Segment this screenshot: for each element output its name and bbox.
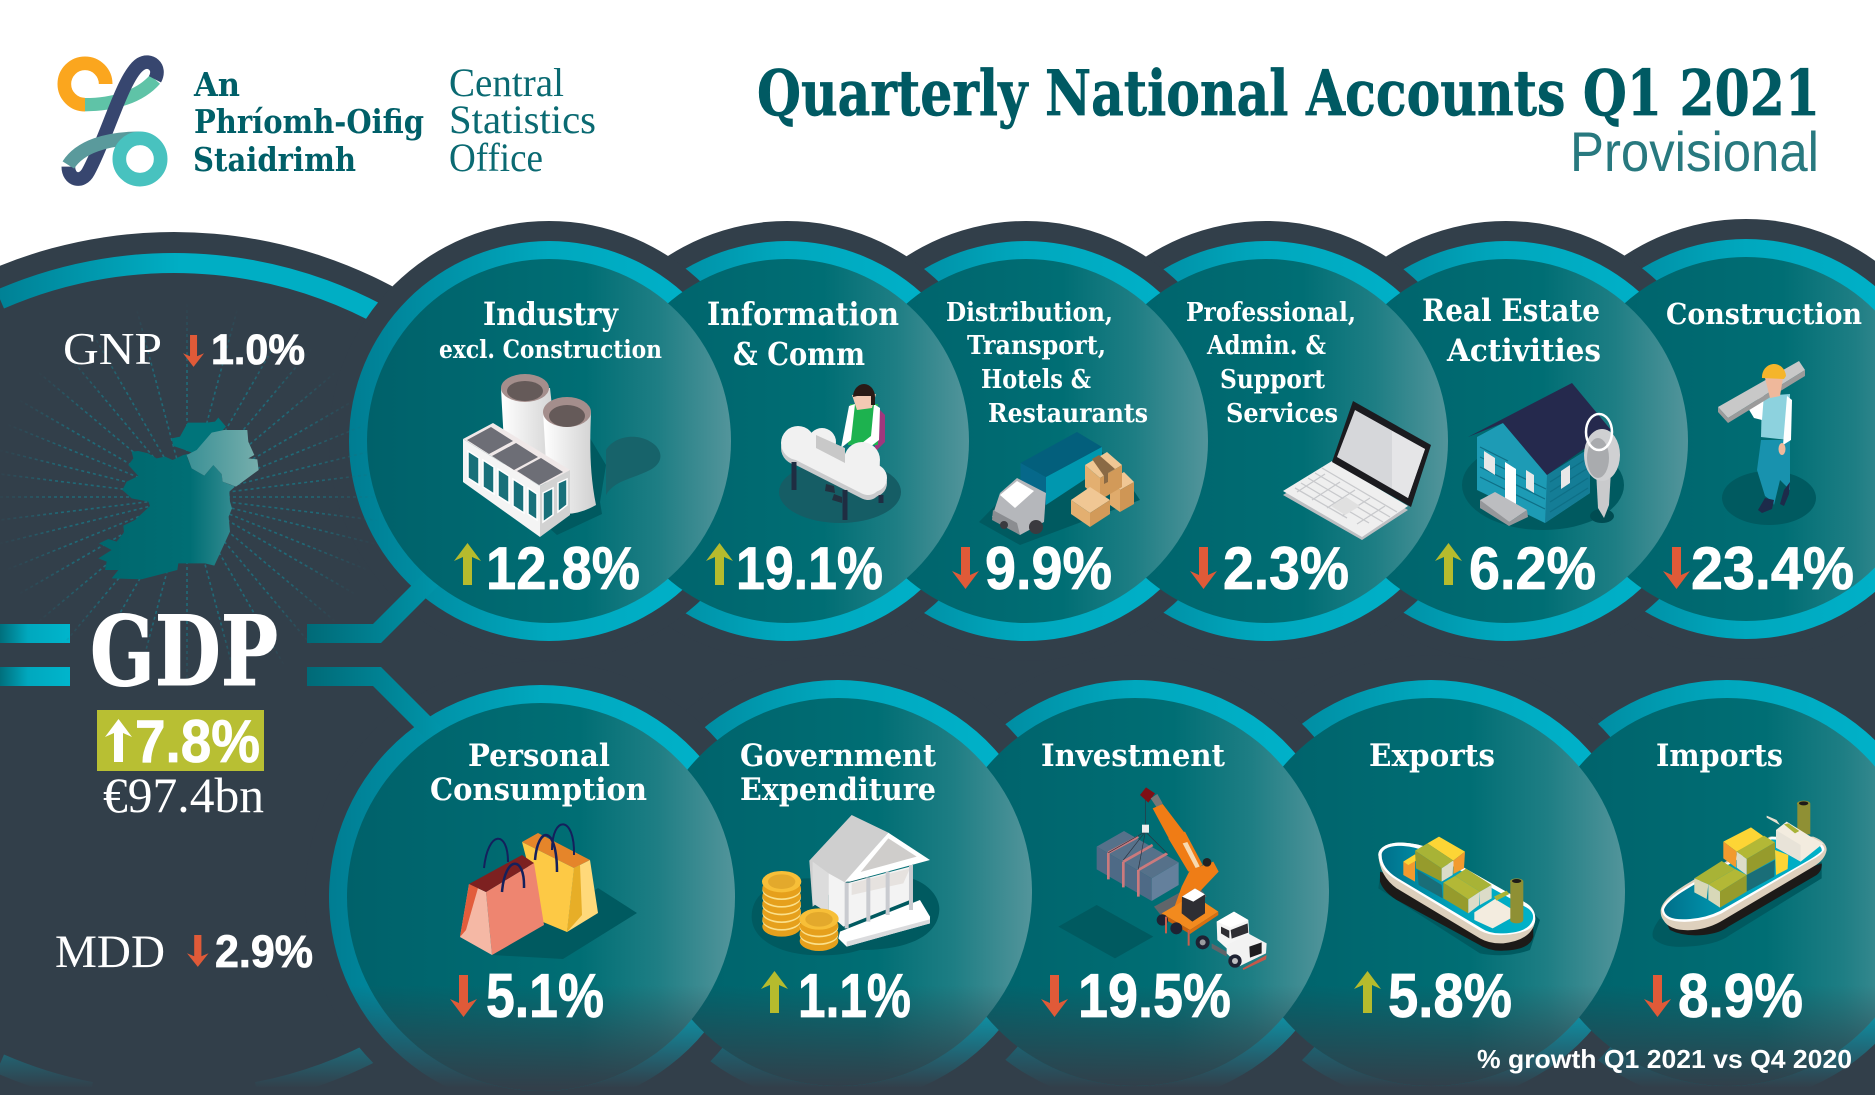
panel: Industry excl. Construction	[367, 259, 731, 623]
logo text: English name	[449, 60, 596, 180]
logo: CSO	[64, 60, 596, 180]
panel: Real Estate Activities: 6.2%	[1469, 535, 1596, 602]
logo text: English name: Central	[449, 60, 564, 105]
icon: crane lifting a module	[1058, 787, 1267, 970]
icon: shopping bags	[460, 824, 637, 959]
logo text: English name: Statistics	[449, 97, 596, 142]
logo text: Irish name	[193, 65, 424, 179]
icon: person at desk	[779, 384, 901, 523]
arrow: down	[952, 547, 979, 589]
panel: Imports: Imports	[1656, 738, 1783, 774]
panel: Distribution, Transport, Hotels & Restaurants: Distribution,	[946, 297, 1113, 328]
background: dark band	[0, 430, 1875, 1095]
panel: Investment: Investment	[1041, 738, 1226, 774]
panel: Personal Consumption: Consumption	[430, 772, 647, 808]
left headline panel backdrop	[0, 232, 420, 1092]
arrow: down	[1663, 547, 1690, 589]
panel: Information & Comm	[605, 259, 969, 623]
icon: container ship	[1652, 801, 1827, 947]
logo text: Irish name: An	[193, 65, 240, 104]
arrow: up	[1435, 543, 1462, 585]
map of Ireland	[98, 418, 259, 579]
panel: Government Expenditure: Expenditure	[740, 772, 936, 808]
MDD stat: 2.9%	[215, 926, 313, 977]
panel: Construction: Construction	[1666, 297, 1862, 331]
panel: Government Expenditure	[644, 698, 1032, 1086]
panel: Real Estate Activities	[1324, 259, 1688, 623]
MDD stat	[55, 926, 313, 978]
GDP growth badge: 7.8%	[135, 708, 260, 775]
panel: Personal Consumption: 5.1%	[486, 962, 604, 1031]
bottom fade	[0, 985, 1875, 1095]
arrow: MDD down	[187, 935, 209, 967]
panel: Industry excl. Construction: excl. Construction	[439, 335, 662, 364]
panel: Real Estate Activities: Activities	[1446, 333, 1601, 369]
panel: Industry excl. Construction: 12.8%	[486, 535, 640, 602]
footnote: % growth Q1 2021 vs Q4 2020	[1477, 1044, 1852, 1074]
panel: Industry excl. Construction: Industry	[483, 296, 620, 333]
GDP connector bars	[0, 549, 470, 768]
arrow: up	[706, 543, 733, 585]
panel: Distribution, Transport, Hotels & Restaurants	[844, 259, 1208, 623]
icon: truck and boxes	[979, 432, 1140, 545]
arrow: up	[761, 971, 788, 1013]
icon: factory with cooling towers	[463, 374, 660, 537]
rays behind map	[0, 302, 382, 692]
icon: laptop	[1283, 401, 1431, 540]
panel: Government Expenditure: 1.1%	[798, 962, 911, 1031]
GNP stat	[63, 323, 305, 374]
panel: Professional, Admin & Support Services	[1084, 259, 1448, 623]
panel rings: bottom row	[305, 655, 1875, 1095]
arrow: down	[1644, 975, 1671, 1017]
panel: Construction	[1564, 257, 1875, 621]
arrow: down	[450, 975, 477, 1017]
panel: Information & Comm: Information	[707, 295, 899, 333]
logo text: English name: Office	[449, 135, 543, 180]
logo mark	[64, 62, 161, 180]
logo text: Irish name: Phríomh-Oifig	[194, 102, 424, 141]
GDP value: €97.4bn	[103, 767, 264, 823]
panel: Exports	[1237, 698, 1625, 1086]
panel: Professional, Admin & Support Services: Services	[1226, 398, 1338, 429]
panel: Professional, Admin & Support Services: Admin. &	[1206, 330, 1326, 361]
panel: Personal Consumption: Personal	[468, 738, 610, 774]
panel: Personal Consumption	[347, 703, 735, 1091]
icon: bank and coins	[752, 815, 939, 955]
arrow: up	[454, 543, 481, 585]
subtitle: Provisional	[1570, 120, 1819, 183]
GDP heading: GDP	[90, 595, 278, 708]
arrow: up	[1354, 971, 1381, 1013]
panel: Information & Comm: 19.1%	[736, 535, 883, 602]
panel: Professional, Admin & Support Services: 2.3%	[1223, 535, 1349, 602]
icon: container ship	[1378, 837, 1540, 955]
arrow: down	[1190, 547, 1217, 589]
arrow: GNP down	[183, 335, 204, 367]
panel: Imports	[1533, 698, 1875, 1086]
GNP stat: GNP	[63, 323, 162, 374]
panel: Professional, Admin & Support Services: Support	[1220, 364, 1326, 395]
logo text: Irish name: Staidrimh	[193, 140, 356, 179]
panel: Information & Comm: & Comm	[733, 335, 865, 373]
icon: house and key	[1462, 383, 1624, 530]
panel: Exports: Exports	[1369, 738, 1495, 774]
panel: Distribution, Transport, Hotels & Restaurants: 9.9%	[985, 535, 1112, 602]
panel: Investment	[941, 698, 1329, 1086]
panel: Construction: 23.4%	[1691, 535, 1854, 602]
panel: Real Estate Activities: Real Estate	[1422, 293, 1600, 329]
GNP stat: 1.0%	[211, 326, 305, 374]
panel: Investment: 19.5%	[1078, 962, 1231, 1031]
panel: Distribution, Transport, Hotels & Restaurants: Restaurants	[988, 398, 1148, 429]
arrow: down	[1041, 975, 1068, 1017]
panel: Exports: 5.8%	[1388, 962, 1512, 1031]
panel: Government Expenditure: Government	[740, 738, 937, 774]
panel: Distribution, Transport, Hotels & Restaurants: Transport,	[967, 330, 1106, 361]
MDD stat: MDD	[55, 926, 165, 978]
panel rings: top row	[329, 219, 1875, 661]
panel: Distribution, Transport, Hotels & Restaurants: Hotels &	[981, 364, 1091, 395]
panel: Professional, Admin & Support Services: Professional,	[1186, 297, 1356, 328]
panel: Imports: 8.9%	[1678, 962, 1803, 1031]
icon: construction worker	[1718, 361, 1816, 525]
